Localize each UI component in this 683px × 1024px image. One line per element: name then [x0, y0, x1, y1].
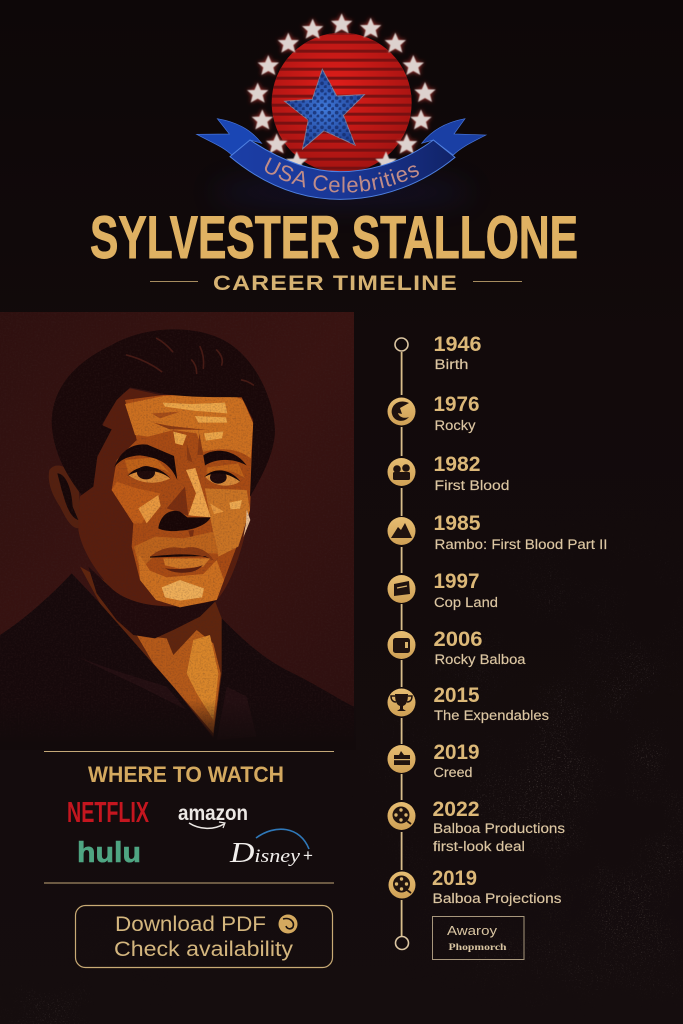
hair — [52, 329, 275, 497]
timeline entry: 2022 — [388, 798, 565, 854]
timeline entry: 1982: First Blood — [434, 478, 510, 493]
timeline entry: 2006: 2006 — [434, 628, 482, 651]
portrait background — [0, 312, 354, 750]
icon: clapperboard — [388, 575, 416, 603]
nose — [158, 468, 211, 543]
eyebrows — [114, 444, 247, 480]
forehead — [125, 393, 253, 458]
ear — [49, 465, 83, 528]
timeline entry: 2019 Balboa Projections: 2019 — [432, 867, 477, 890]
collar shading — [77, 657, 257, 740]
ribbon text: USA Celebrities — [264, 157, 419, 192]
ribbon tails — [197, 119, 486, 155]
button: download PDF: Check availability — [114, 938, 294, 961]
red striped circle — [272, 33, 412, 173]
where to watch heading: WHERE TO WATCH — [88, 762, 284, 787]
icon: belt — [388, 745, 416, 773]
neck — [80, 567, 222, 737]
ring of white stars — [247, 13, 436, 171]
timeline entry: 1997 — [388, 570, 498, 610]
timeline entry: 1997: 1997 — [434, 570, 480, 593]
icon: mountains — [388, 517, 416, 545]
icon: wallet — [388, 631, 416, 659]
logo: USA Celebrities badge — [196, 12, 488, 200]
timeline entry: 2019 Balboa Projections: Balboa Projections — [432, 891, 562, 906]
timeline entry: 1985: Rambo: First Blood Part II — [434, 537, 608, 552]
button: download PDF — [76, 906, 332, 968]
award box: Awaroy — [447, 923, 498, 938]
timeline line segments — [401, 352, 402, 937]
Amazon logo: amazon — [178, 802, 248, 825]
icon: trophy — [388, 688, 416, 716]
timeline entry: 2015: The Expendables — [434, 708, 549, 723]
timeline entry: 2006 — [388, 628, 526, 667]
icon: film reel — [388, 802, 416, 830]
timeline entry: 1982 — [388, 453, 510, 493]
icon: film reel — [388, 872, 416, 898]
mid tone — [112, 395, 253, 600]
timeline entry: 2015 — [388, 684, 549, 723]
swirl icon — [278, 914, 298, 934]
timeline entry: 2019 Creed: 2019 — [434, 741, 480, 764]
face — [78, 388, 253, 607]
blue centre star — [285, 69, 364, 149]
timeline entry: 1985 — [388, 512, 608, 552]
Disney+ logo — [229, 829, 313, 869]
portrait fade into page — [0, 700, 356, 750]
left cheek — [112, 482, 161, 523]
timeline entry: 2022: 2022 — [432, 798, 480, 821]
chin — [138, 553, 224, 607]
ribbon band — [230, 140, 455, 199]
Disney+ logo: + — [303, 846, 313, 865]
timeline entry: 2022: Balboa Productions — [433, 821, 565, 836]
Hulu logo: hulu — [77, 837, 141, 869]
eyes — [127, 466, 241, 486]
timeline entry: 1946: 1946 — [434, 333, 482, 356]
Disney+ logo: Disney — [229, 837, 301, 869]
upper lids shading — [125, 457, 172, 475]
award box: Phopmorch — [448, 943, 507, 953]
timeline entry: 1997: Cop Land — [434, 595, 498, 610]
mouth — [150, 547, 214, 573]
timeline end marker — [396, 936, 408, 950]
portrait panel — [0, 312, 354, 750]
icon: film camera — [388, 458, 416, 486]
panel: where to watch — [44, 751, 334, 884]
timeline entry: 1946: Birth — [434, 357, 468, 372]
timeline entry: 1976 — [388, 393, 480, 433]
timeline entry: 1985: 1985 — [434, 512, 481, 535]
timeline entry: 1976: 1976 — [434, 393, 480, 416]
shirt — [0, 573, 354, 750]
timeline entry: 1982: 1982 — [434, 453, 480, 476]
jaw and mouth area — [134, 532, 218, 570]
timeline entry: 2015: 2015 — [434, 684, 480, 707]
timeline entry: 2019 Creed: Creed — [434, 765, 472, 780]
timeline entry: 1976: Rocky — [434, 418, 476, 433]
button: download PDF: Download PDF — [115, 913, 266, 936]
face base — [78, 388, 253, 606]
icon: swoosh — [388, 398, 416, 426]
timeline entry: 2019 Balboa Projections — [388, 867, 562, 906]
right cheek — [205, 488, 250, 557]
timeline entry: 2022: first-look deal — [433, 839, 525, 854]
award box — [432, 916, 524, 960]
timeline entry: 2006: Rocky Balboa — [434, 652, 526, 667]
timeline entry: 1946 — [434, 333, 482, 372]
Netflix logo: NETFLIX — [67, 797, 149, 829]
timeline entry: 2019 Creed — [388, 741, 480, 780]
subtitle: CAREER TIMELINE — [213, 271, 458, 295]
timeline start marker — [395, 338, 408, 351]
portrait grain — [0, 312, 354, 737]
